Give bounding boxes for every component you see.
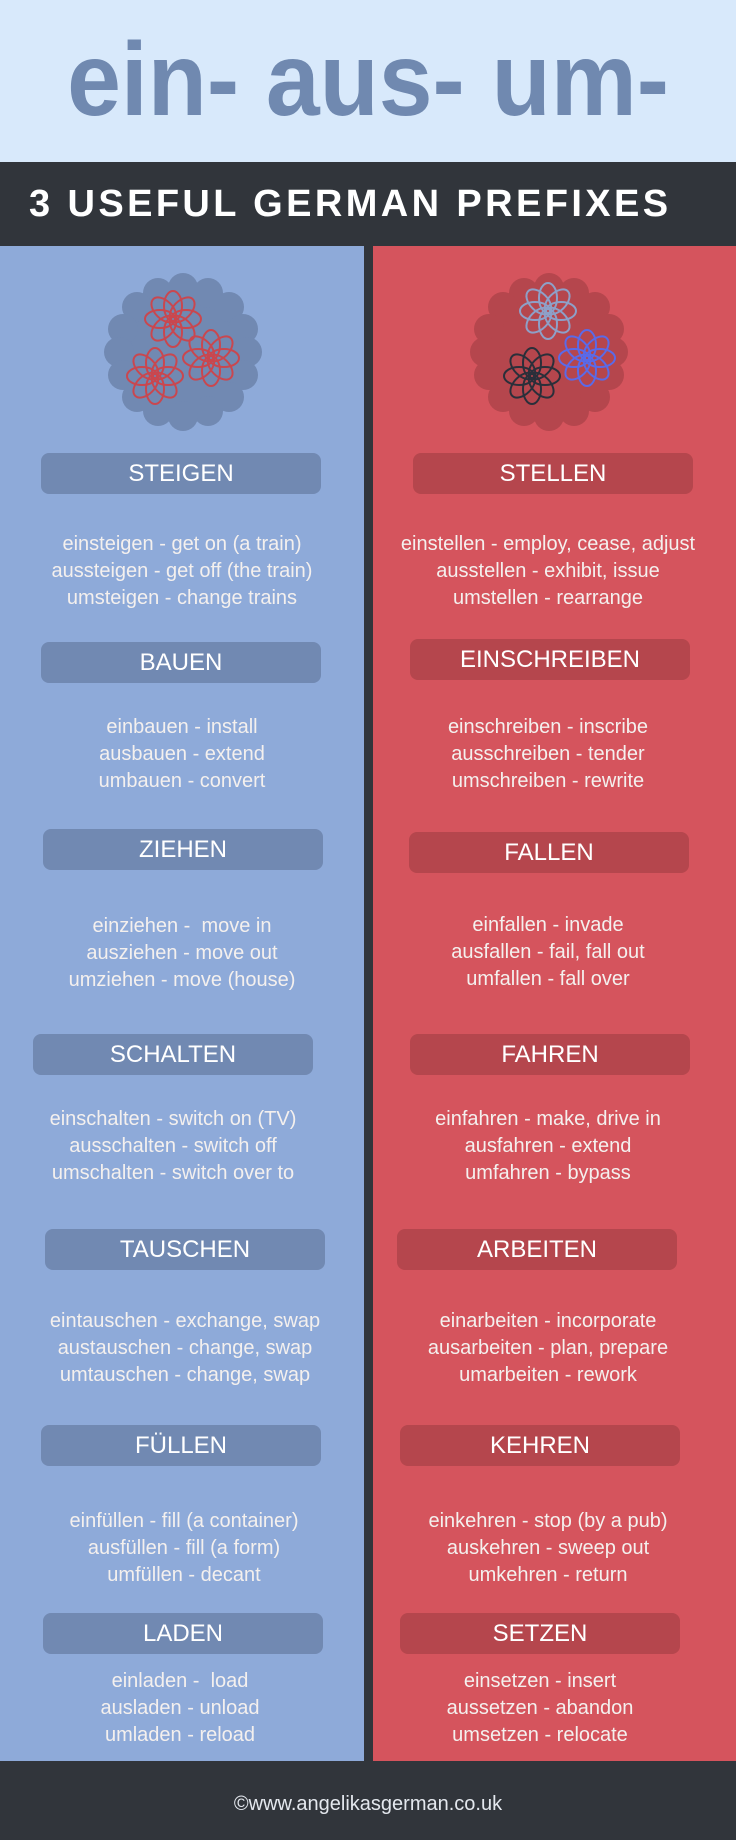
heading: EINSCHREIBEN: EINSCHREIBEN — [460, 646, 640, 673]
icon: right flower cluster — [470, 273, 628, 431]
text: laden: einladen - load ausladen - unload umladen - reload — [100, 1670, 260, 1746]
heading: BAUEN — [41, 642, 321, 683]
heading: ZIEHEN — [43, 829, 323, 870]
footer text: ©www.angelikasgerman.co.uk — [234, 1793, 502, 1815]
heading: LADEN: LADEN — [143, 1620, 223, 1647]
text: fahren: einfahren - make, drive in ausfahren - extend umfahren - bypass — [435, 1108, 661, 1184]
heading: FAHREN: FAHREN — [501, 1041, 599, 1068]
panel: left blue — [0, 246, 364, 1761]
text: arbeiten: einarbeiten - incorporate ausarbeiten - plan, prepare umarbeiten - rework — [428, 1310, 668, 1386]
heading: FAHREN — [410, 1034, 690, 1075]
text: bauen: einbauen - install ausbauen - extend umbauen - convert — [99, 716, 265, 792]
heading: TAUSCHEN: TAUSCHEN — [120, 1236, 250, 1263]
text: setzen: einsetzen - insert aussetzen - abandon umsetzen - relocate — [447, 1670, 633, 1746]
heading: STEIGEN — [41, 453, 321, 494]
heading: BAUEN: BAUEN — [140, 649, 222, 676]
subtitle band — [0, 162, 736, 246]
text: schalten: einschalten - switch on (TV) ausschalten - switch off umschalten - switch over to — [50, 1108, 296, 1184]
text: steigen: einsteigen - get on (a train) aussteigen - get off (the train) umsteigen - change trains — [52, 533, 312, 609]
heading: EINSCHREIBEN — [410, 639, 690, 680]
heading: STEIGEN: STEIGEN — [128, 460, 234, 487]
heading: FÜLLEN — [41, 1425, 321, 1466]
heading: SCHALTEN: SCHALTEN — [110, 1041, 236, 1068]
text: schreiben: einschreiben - inscribe ausschreiben - tender umschreiben - rewrite — [448, 716, 648, 792]
header band — [0, 0, 736, 162]
subtitle: 3 USEFUL GERMAN PREFIXES — [29, 183, 672, 225]
text: tauschen: eintauschen - exchange, swap austauschen - change, swap umtauschen - change, swap — [50, 1310, 320, 1386]
heading: TAUSCHEN — [45, 1229, 325, 1270]
heading: FÜLLEN: FÜLLEN — [135, 1432, 227, 1459]
text: stellen: einstellen - employ, cease, adjust ausstellen - exhibit, issue umstellen - rearrange — [401, 533, 695, 609]
heading: ZIEHEN: ZIEHEN — [139, 836, 227, 863]
heading: SETZEN: SETZEN — [493, 1620, 587, 1647]
heading: ARBEITEN: ARBEITEN — [477, 1236, 597, 1263]
heading: KEHREN: KEHREN — [490, 1432, 590, 1459]
text: ziehen: einziehen - move in ausziehen - move out umziehen - move (house) — [69, 915, 295, 991]
footer — [0, 1761, 736, 1840]
heading: SCHALTEN — [33, 1034, 313, 1075]
heading: FALLEN: FALLEN — [504, 839, 594, 866]
heading: FALLEN — [409, 832, 689, 873]
heading: ARBEITEN — [397, 1229, 677, 1270]
title: ein- aus- um- — [67, 22, 669, 138]
text: fallen: einfallen - invade ausfallen - fail, fall out umfallen - fall over — [451, 914, 645, 990]
panel: right red — [373, 246, 736, 1761]
heading: LADEN — [43, 1613, 323, 1654]
text: füllen: einfüllen - fill (a container) ausfüllen - fill (a form) umfüllen - decant — [70, 1510, 298, 1586]
heading: KEHREN — [400, 1425, 680, 1466]
heading: STELLEN: STELLEN — [500, 460, 606, 487]
text: kehren: einkehren - stop (by a pub) auskehren - sweep out umkehren - return — [428, 1510, 668, 1586]
heading: STELLEN — [413, 453, 693, 494]
icon: left flower cluster — [104, 273, 262, 431]
heading: SETZEN — [400, 1613, 680, 1654]
